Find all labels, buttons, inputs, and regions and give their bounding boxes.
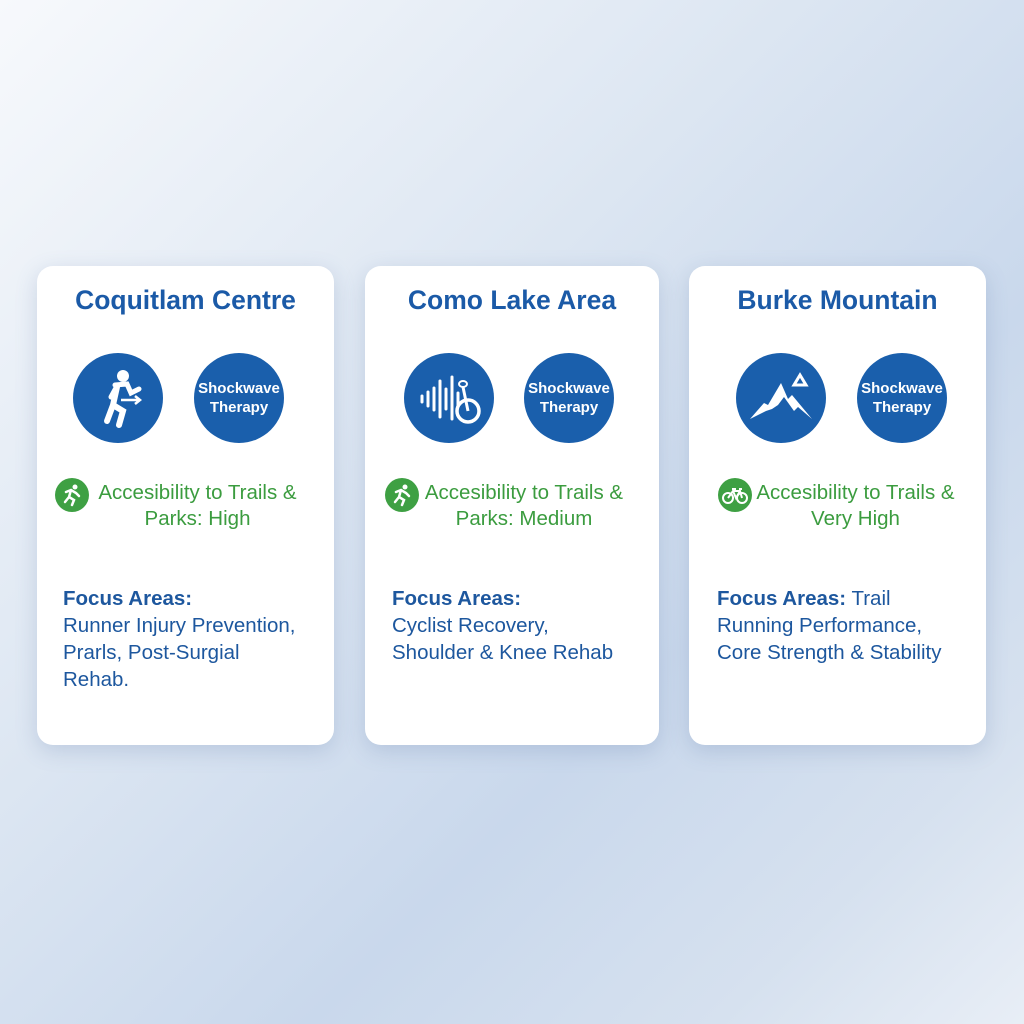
title: Como Lake Area <box>408 285 616 315</box>
icon: green runner <box>55 478 89 512</box>
title: Burke Mountain <box>737 285 938 315</box>
accessibility text: Parks: Medium <box>456 507 592 530</box>
focus areas <box>717 587 942 664</box>
accessibility text: Accesibility to Trails & <box>98 481 297 504</box>
icon: mountain <box>736 353 826 443</box>
accessibility text: Parks: High <box>145 507 250 530</box>
accessibility text <box>98 481 297 530</box>
focus areas: Focus Areas: <box>63 587 192 610</box>
icon: shockwave therapy: Therapy <box>873 399 931 416</box>
icon: green bicycle <box>718 478 752 512</box>
card: Coquitlam Centre <box>37 266 334 745</box>
icon: green runner <box>385 478 419 512</box>
focus areas: Running Performance, <box>717 614 922 637</box>
accessibility text <box>425 481 623 530</box>
accessibility text: Accesibility to Trails & <box>425 481 623 504</box>
icon: shockwave therapy: Shockwave <box>198 380 280 397</box>
icon: shockwave therapy <box>857 353 947 443</box>
focus areas: Focus Areas: <box>392 587 521 610</box>
focus areas: Rehab. <box>63 668 129 691</box>
icon: shockwave therapy <box>524 353 614 443</box>
icon: shockwave therapy: Therapy <box>540 399 598 416</box>
accessibility text <box>756 481 955 530</box>
focus areas: Shoulder & Knee Rehab <box>392 641 613 664</box>
focus areas: Focus Areas: Trail <box>717 587 891 610</box>
focus areas: Prarls, Post-Surgial <box>63 641 240 664</box>
icon: shockwave therapy <box>194 353 284 443</box>
icon: sound wave and wheel <box>404 353 494 443</box>
icon: shockwave therapy: Shockwave <box>861 380 943 397</box>
card: Como Lake Area <box>365 266 659 745</box>
accessibility text: Accesibility to Trails & <box>756 481 955 504</box>
focus areas: Runner Injury Prevention, <box>63 614 295 637</box>
focus areas <box>392 587 613 664</box>
card: Burke Mountain <box>689 266 986 745</box>
focus areas: Cyclist Recovery, <box>392 614 549 637</box>
icon: shockwave therapy: Shockwave <box>528 380 610 397</box>
icon: runner <box>73 353 163 443</box>
accessibility text: Very High <box>811 507 900 530</box>
focus areas <box>63 587 295 691</box>
icon: shockwave therapy: Therapy <box>210 399 268 416</box>
focus areas: Core Strength & Stability <box>717 641 941 664</box>
title: Coquitlam Centre <box>75 285 296 315</box>
